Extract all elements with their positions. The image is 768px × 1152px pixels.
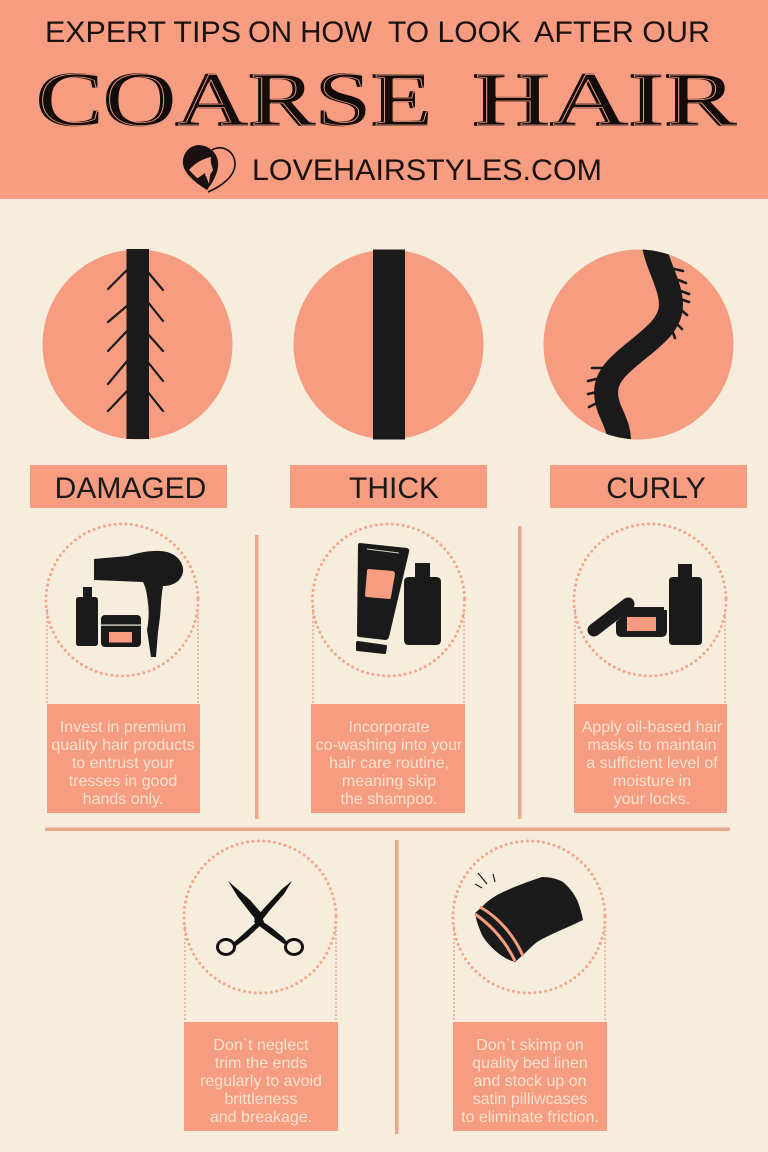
label: curly: CURLY <box>606 472 706 505</box>
tip card: co-washing: co-washing into your <box>316 737 463 754</box>
tip card: premium products <box>46 524 200 813</box>
tip card: premium products: hands only. <box>83 791 163 808</box>
diagram: thick hair <box>294 250 484 440</box>
title: coarse hair: HAIR <box>472 58 736 142</box>
title: coarse hair: COARSE <box>36 58 432 142</box>
tip card: satin pillowcases: Don`t skimp on <box>476 1037 584 1054</box>
label: damaged <box>30 465 227 508</box>
title: coarse hair: HAIR <box>474 58 739 142</box>
tip card: trim ends: and breakage. <box>210 1109 312 1126</box>
header banner <box>0 0 768 199</box>
header tagline: EXPERT TIPS <box>45 16 241 49</box>
label: thick <box>290 465 487 508</box>
diagram: damaged hair <box>42 249 232 440</box>
tip card: satin pillowcases: to eliminate friction. <box>461 1109 599 1126</box>
header tagline <box>45 16 710 49</box>
label: curly <box>550 465 747 508</box>
tip card: trim ends <box>184 841 338 1131</box>
tip card: co-washing <box>311 524 465 813</box>
icon: tube and bottle <box>356 543 441 654</box>
tip card: satin pillowcases <box>453 841 607 1131</box>
icon: open jar and bottle <box>594 564 702 645</box>
label: thick: THICK <box>349 472 439 505</box>
tip card: trim ends: brittleness <box>225 1091 297 1108</box>
tip card: co-washing: meaning skip <box>342 773 436 790</box>
tip card: hair masks: masks to maintain <box>588 737 716 754</box>
tip card: premium products: quality hair products <box>51 737 195 754</box>
tip card: trim ends: regularly to avoid <box>200 1073 322 1090</box>
header tagline: TO LOOK <box>388 16 521 49</box>
tip card: hair masks: a sufficient level of <box>586 755 718 772</box>
tip card: premium products: Invest in premium <box>60 719 186 736</box>
header tagline: AFTER OUR <box>534 16 710 49</box>
tip card: trim ends: Don`t neglect <box>213 1037 309 1054</box>
tip card: co-washing: Incorporate <box>349 719 430 736</box>
website name: LOVEHAIRSTYLES.COM <box>252 154 602 187</box>
icon: hair dryer, bottle, jar <box>76 551 183 657</box>
tip card: co-washing: hair care routine, <box>329 755 449 772</box>
tip card: trim ends: trim the ends <box>215 1055 307 1072</box>
tip card: hair masks: your locks. <box>614 791 690 808</box>
tip card: hair masks: moisture in <box>613 773 691 790</box>
tip card: satin pillowcases: satin pilliwcases <box>473 1091 587 1108</box>
label: damaged: DAMAGED <box>55 472 206 505</box>
tip card: premium products: tresses in good <box>69 773 177 790</box>
tip card: satin pillowcases: and stock up on <box>474 1073 586 1090</box>
icon: pillow <box>475 873 583 962</box>
tip card: co-washing: the shampoo. <box>341 791 437 808</box>
tip card: hair masks <box>574 524 727 813</box>
tip card: hair masks: Apply oil-based hair <box>582 719 723 736</box>
diagram: curly hair <box>544 245 734 445</box>
icon: scissors <box>218 881 302 954</box>
tip card: satin pillowcases: quality bed linen <box>472 1055 588 1072</box>
title: coarse hair: COARSE <box>38 58 434 142</box>
title: coarse hair <box>36 58 739 142</box>
logo: woman in heart <box>183 145 235 192</box>
header tagline: ON HOW <box>248 16 373 49</box>
tip card: premium products: to entrust your <box>72 755 175 772</box>
